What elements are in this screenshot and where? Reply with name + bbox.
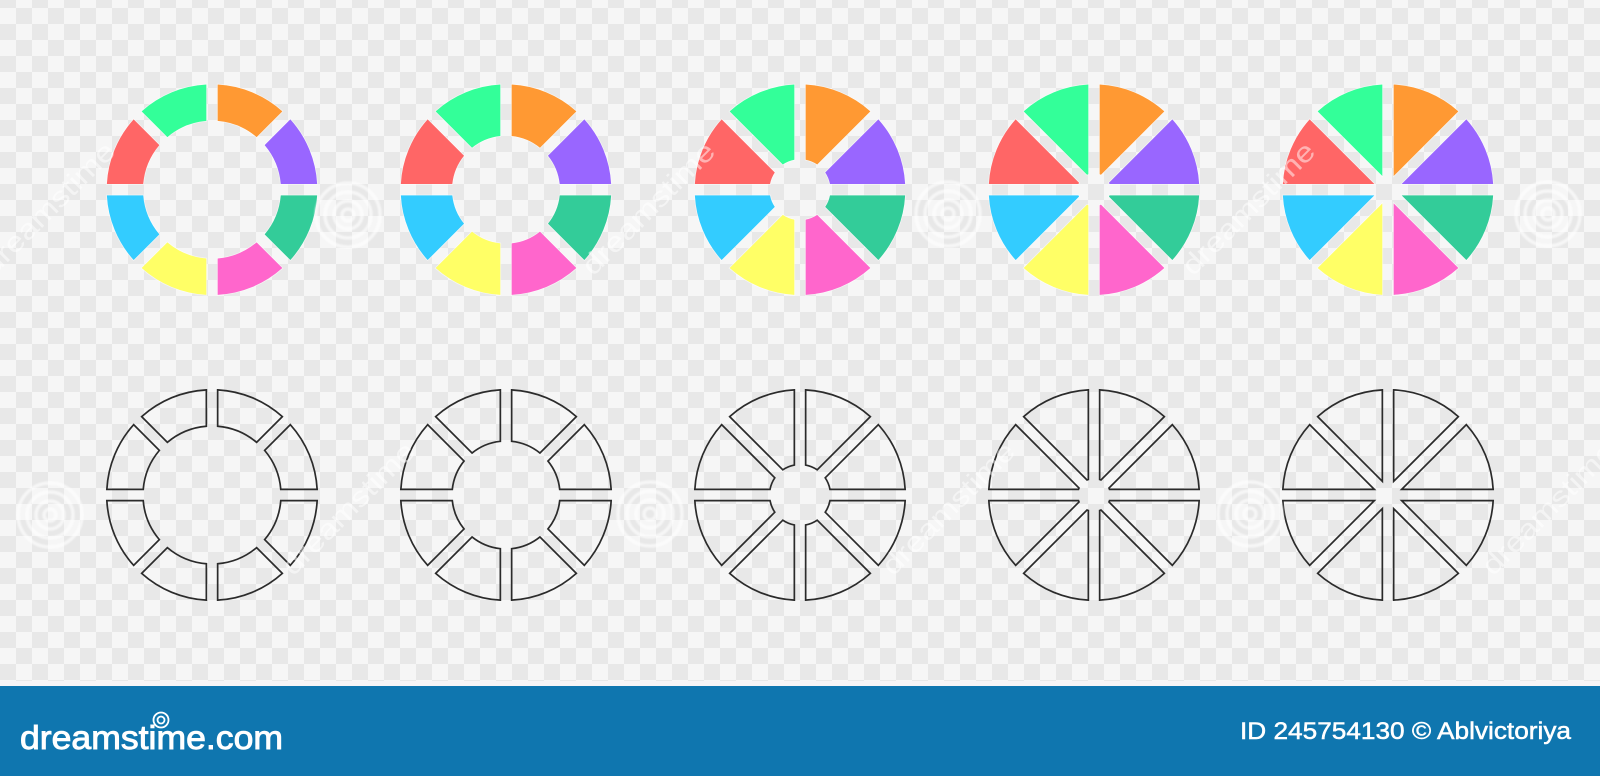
segment: orange <box>512 85 576 148</box>
outline segment: top right <box>806 390 870 470</box>
outline segment: left lower <box>107 501 159 565</box>
footer background <box>0 686 1600 776</box>
segment: yellow <box>142 242 206 295</box>
outline segment: bottom right <box>806 520 870 600</box>
segment: teal <box>1109 195 1199 260</box>
outline segment: top left <box>1024 390 1088 480</box>
outline segment: left lower <box>989 501 1079 565</box>
segment: purple <box>548 119 611 184</box>
footer logo text: dreamstime.com <box>20 719 283 756</box>
segment: red <box>401 119 464 184</box>
colored pie 5: full wedges <box>1283 85 1493 295</box>
segment: teal <box>265 195 317 260</box>
segment: purple <box>825 119 905 184</box>
outline segment: left upper <box>401 425 464 489</box>
outline segment: right upper <box>548 425 611 489</box>
pale strip above footer <box>0 681 1600 686</box>
outline segment: top left <box>730 390 794 470</box>
segment: purple <box>1402 119 1493 184</box>
segment: red <box>107 119 159 184</box>
colored donut 4: tiny hole <box>989 85 1199 295</box>
outline donut 3: small hole <box>695 390 905 600</box>
outline segment: top right <box>1100 390 1164 480</box>
outline segment: right lower <box>265 501 317 565</box>
outline segment: right upper <box>1109 425 1199 489</box>
outline segment: right upper <box>825 425 905 489</box>
outline segment: left lower <box>695 501 775 565</box>
outline segment: top right <box>512 390 576 453</box>
segment: teal <box>825 195 905 260</box>
segment: red <box>989 119 1079 184</box>
segment: teal <box>548 195 611 260</box>
outline segment: top left <box>1318 390 1382 481</box>
outline segment: bottom right <box>218 548 282 600</box>
outline segment: bottom left <box>730 520 794 600</box>
outline segment: left lower <box>1283 501 1374 565</box>
watermark text 6: dreamstime <box>1475 435 1600 581</box>
segment: green <box>142 85 206 137</box>
segment: green <box>1318 85 1382 176</box>
watermark spiral 6 <box>1218 482 1282 546</box>
segment: pink <box>1100 205 1164 295</box>
outline segment: bottom right <box>1100 510 1164 600</box>
segment: red <box>1283 119 1374 184</box>
outline segment: left lower <box>401 501 464 565</box>
outline segment: top right <box>218 390 282 442</box>
watermark text 4: dreamstime <box>275 435 421 581</box>
segment: yellow <box>436 232 500 295</box>
outline donut 2: medium ring <box>401 390 611 600</box>
outline segment: bottom right <box>1394 509 1458 600</box>
outline segment: bottom left <box>436 537 500 600</box>
outline segment: left upper <box>989 425 1079 489</box>
segment: yellow <box>1318 203 1382 295</box>
segment: pink <box>512 232 576 295</box>
watermark text 2: dreamstime <box>575 135 721 281</box>
outline segment: right lower <box>1402 501 1493 565</box>
footer bar <box>0 686 1600 776</box>
segment: purple <box>265 119 317 184</box>
outline donut 4: tiny hole <box>989 390 1199 600</box>
outline segment: top left <box>436 390 500 453</box>
outline segment: right lower <box>825 501 905 565</box>
outline segment: top left <box>142 390 206 442</box>
segment: blue <box>401 195 464 260</box>
segment: orange <box>218 85 282 137</box>
segment: green <box>730 85 794 164</box>
watermark text 5: dreamstime <box>875 435 1021 581</box>
outline segment: bottom left <box>1024 510 1088 600</box>
segment: pink <box>806 215 870 295</box>
segment: purple <box>1109 119 1199 184</box>
segment: blue <box>107 195 159 260</box>
outline segment: bottom left <box>142 548 206 600</box>
outline segment: right upper <box>265 425 317 489</box>
segment: pink <box>1394 203 1458 295</box>
footer image id and credit: ID 245754130 © Ablvictoriya <box>1240 718 1572 745</box>
outline segment: left upper <box>1283 425 1374 489</box>
outline donut 1: thin ring <box>107 390 317 600</box>
segment: orange <box>806 85 870 164</box>
segment: yellow <box>730 215 794 295</box>
segment: yellow <box>1024 205 1088 295</box>
segment: red <box>695 119 775 184</box>
outline segment: right lower <box>548 501 611 565</box>
watermark spiral 5 <box>618 482 682 546</box>
segment: orange <box>1100 85 1164 175</box>
outline segment: right upper <box>1402 425 1493 489</box>
segment: teal <box>1402 195 1493 260</box>
colored donut 2: medium ring <box>401 85 611 295</box>
segment: blue <box>1283 195 1374 260</box>
watermark text 3: dreamstime <box>1175 135 1321 281</box>
colored donut 1: thin ring <box>107 85 317 295</box>
segment: pink <box>218 242 282 295</box>
footer logo spiral icon <box>154 712 168 728</box>
watermark spiral 1 <box>316 183 380 247</box>
watermark spiral 3 <box>1516 182 1580 246</box>
outline segment: top right <box>1394 390 1458 481</box>
outline segment: left upper <box>695 425 775 489</box>
outline segment: bottom right <box>512 537 576 600</box>
watermark spiral 4 <box>18 483 82 547</box>
segment: orange <box>1394 85 1458 176</box>
watermark spiral 2 <box>916 182 980 246</box>
segment: green <box>1024 85 1088 175</box>
outline pie 5: full wedges <box>1283 390 1493 600</box>
outline segment: right lower <box>1109 501 1199 565</box>
colored donut 3: small hole <box>695 85 905 295</box>
segment: blue <box>989 195 1079 260</box>
segment: blue <box>695 195 775 260</box>
segment: green <box>436 85 500 148</box>
outline segment: left upper <box>107 425 159 489</box>
outline segment: bottom left <box>1318 509 1382 600</box>
